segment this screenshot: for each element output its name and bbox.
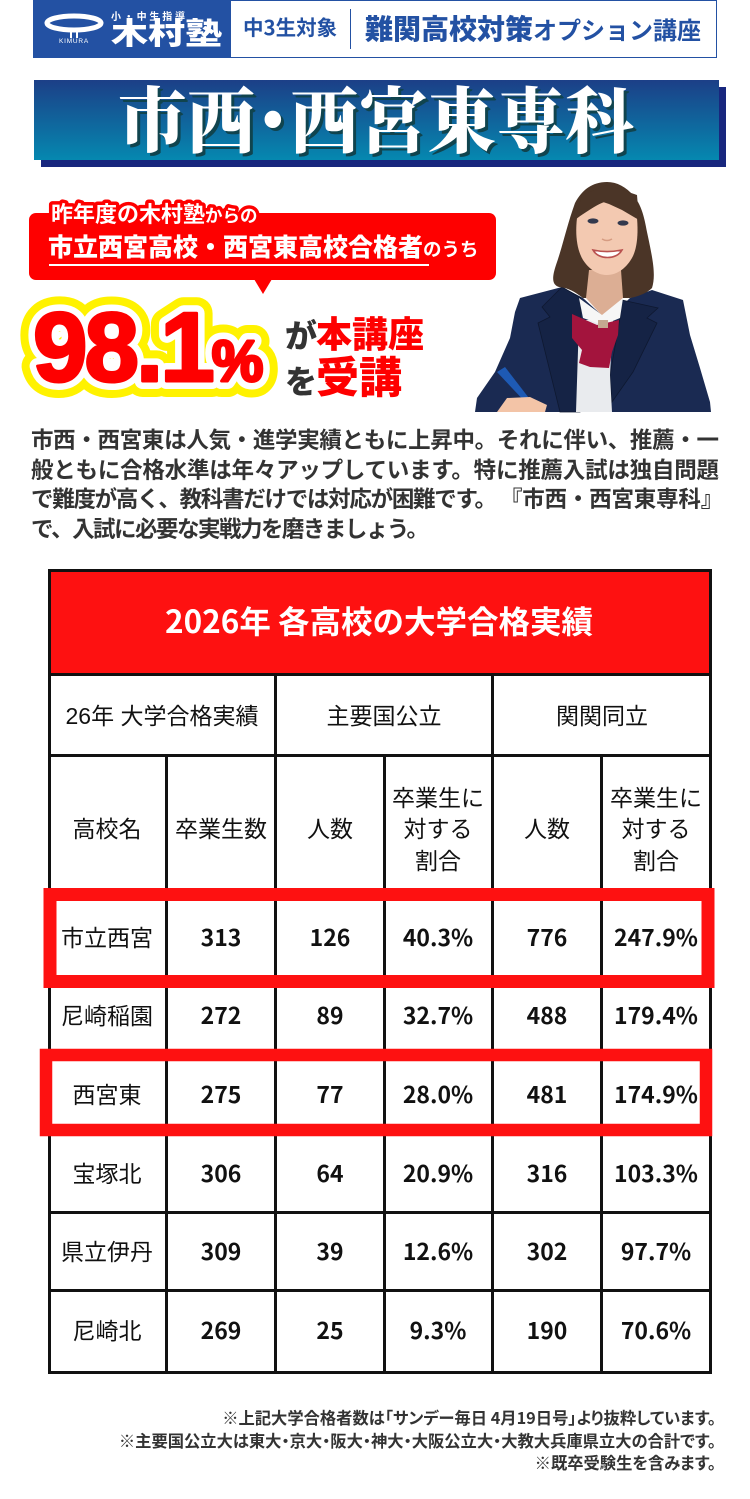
row: 尼崎稲園: 272	[201, 997, 241, 1031]
hair	[553, 182, 654, 298]
row: 宝塚北: 20.9%	[403, 1155, 473, 1189]
collar	[579, 298, 623, 325]
column header row: 卒業生に	[610, 785, 702, 811]
row: 宝塚北: 宝塚北	[72, 1161, 142, 1187]
row: 西宮東: 西宮東	[72, 1082, 142, 1108]
row: 尼崎北: 70.6%	[621, 1312, 691, 1346]
row: 市立西宮	[61, 919, 698, 953]
logo panel: Kimura juku: 小・中生指導	[111, 8, 185, 23]
bubble line 1: 昨年度の木村塾からの	[51, 202, 258, 227]
row: 市立西宮: 126	[310, 919, 350, 953]
jacket	[475, 287, 711, 412]
intro paragraph: 『市西・西宮東専科』	[500, 482, 723, 514]
row: 尼崎北: 190	[527, 1312, 567, 1346]
fringe	[575, 185, 639, 220]
row: 尼崎稲園: 179.4%	[614, 997, 698, 1031]
row: 尼崎北	[72, 1312, 691, 1346]
lapels	[538, 287, 581, 412]
column header row: 対する	[404, 816, 472, 842]
row: 西宮東: 77	[316, 1076, 344, 1110]
course attendance text: 受講	[316, 355, 402, 403]
row: 西宮東: 275	[201, 1076, 241, 1110]
intro paragraph: で難度が高く、教科書だけでは対応が困難です。	[31, 482, 497, 514]
nose	[602, 239, 612, 240]
row: 県立伊丹: 309	[201, 1233, 241, 1267]
row: 市立西宮: 247.9%	[614, 919, 698, 953]
table title	[50, 571, 710, 674]
highlight frame: 市立西宮	[50, 894, 708, 982]
column header row	[72, 785, 702, 874]
row: 西宮東	[72, 1076, 698, 1110]
course attendance text	[285, 314, 424, 403]
blouse	[576, 320, 613, 412]
hand	[497, 397, 547, 412]
bubble line 1: 昨年度の木村塾からの	[51, 202, 258, 227]
row: 尼崎北: 9.3%	[410, 1312, 466, 1346]
title banner: 市西･西宮東専科	[121, 67, 637, 171]
row: 尼崎北: 尼崎北	[72, 1318, 142, 1344]
illustration: student	[475, 182, 711, 412]
column header row: 卒業生に	[392, 785, 484, 811]
row: 尼崎稲園: 488	[527, 997, 567, 1031]
intro paragraph: 市西・西宮東は人気・進学実績ともに上昇中。それに伴い、推薦・一	[31, 423, 719, 455]
column header row: 人数	[307, 816, 353, 842]
row: 市立西宮: 40.3%	[403, 919, 473, 953]
column header row: 割合	[415, 848, 461, 874]
mouth	[593, 250, 622, 258]
pen	[497, 367, 532, 405]
row: 県立伊丹: 39	[316, 1233, 344, 1267]
neck	[586, 270, 623, 318]
column header row: 対する	[622, 816, 690, 842]
course attendance text: を	[285, 364, 317, 400]
row: 尼崎稲園	[61, 997, 698, 1031]
eyes	[588, 218, 598, 224]
row: 県立伊丹	[61, 1233, 691, 1267]
footnotes: ※既卒受験生を含みます。	[535, 1450, 716, 1474]
footnotes: ※上記大学合格者数は「サンデー毎日 4月19日号」より抜粋しています。	[222, 1405, 716, 1429]
group header row: 26年 大学合格実績	[66, 703, 258, 729]
group header row: 主要国公立	[326, 703, 442, 729]
row: 市立西宮: 市立西宮	[61, 925, 153, 951]
course attendance text: 本講座	[316, 314, 424, 355]
group header row	[66, 703, 648, 729]
column header row: 卒業生数	[175, 816, 267, 842]
results table	[48, 569, 712, 1374]
row: 西宮東: 481	[527, 1076, 567, 1110]
face	[576, 200, 638, 275]
row: 宝塚北: 103.3%	[614, 1155, 698, 1189]
group header row: 関関同立	[556, 703, 648, 729]
highlight frame: 西宮東	[46, 1055, 706, 1130]
row: 県立伊丹: 97.7%	[621, 1233, 691, 1267]
big percentage: 98.1%: 98.1%	[33, 292, 263, 402]
row: 宝塚北: 306	[201, 1155, 241, 1189]
header title: course name: 難関高校対策オプション講座	[365, 8, 701, 48]
row: 宝塚北: 316	[527, 1155, 567, 1189]
row: 尼崎稲園: 89	[316, 997, 344, 1031]
row: 西宮東: 28.0%	[403, 1076, 473, 1110]
row: 宝塚北: 64	[316, 1155, 344, 1189]
footnotes	[119, 1405, 716, 1474]
logo panel: Kimura juku: KIMURA	[59, 38, 89, 45]
table title: 2026年 各高校の大学合格実績	[165, 597, 593, 643]
logo panel: Kimura juku	[33, 0, 231, 58]
logo panel: Kimura juku: 木村塾	[111, 9, 222, 53]
row: 市立西宮: 776	[527, 919, 567, 953]
intro paragraph: 般ともに合格水準は年々アップしています。特に推薦入試は独自問題	[31, 453, 719, 485]
column header row: 割合	[633, 848, 679, 874]
row: 県立伊丹: 302	[527, 1233, 567, 1267]
column header row: 高校名	[72, 816, 142, 842]
row: 市立西宮: 313	[201, 919, 241, 953]
row: 県立伊丹: 県立伊丹	[61, 1239, 153, 1265]
row: 西宮東: 174.9%	[614, 1076, 698, 1110]
ribbon	[572, 314, 619, 368]
red speech bubble	[29, 202, 496, 294]
row: 尼崎稲園: 32.7%	[403, 997, 473, 1031]
intro paragraph: で、入試に必要な実戦力を磨きましょう。	[31, 512, 429, 544]
row: 県立伊丹: 12.6%	[403, 1233, 473, 1267]
big percentage: 98.1%: 98.1%	[33, 292, 263, 402]
header label: target grade: 中3生対象	[243, 11, 337, 41]
bubble line 2: 市立西宮高校・西宮東高校合格者のうち	[48, 228, 479, 264]
row: 尼崎稲園: 尼崎稲園	[61, 1003, 153, 1029]
column header row: 人数	[524, 816, 570, 842]
intro paragraph	[31, 423, 723, 544]
course attendance text: が	[285, 318, 317, 354]
title banner: 市西･西宮東専科	[118, 64, 634, 168]
row: 宝塚北	[72, 1155, 698, 1189]
row: 尼崎北: 25	[316, 1312, 344, 1346]
big percentage: 98.1%: 98.1%	[33, 292, 263, 402]
header bar	[33, 0, 716, 58]
footnotes: ※主要国公立大は東大・京大・阪大・神大・大阪公立大・大教大兵庫県立大の合計です。	[119, 1428, 716, 1452]
row: 尼崎北: 269	[201, 1312, 241, 1346]
